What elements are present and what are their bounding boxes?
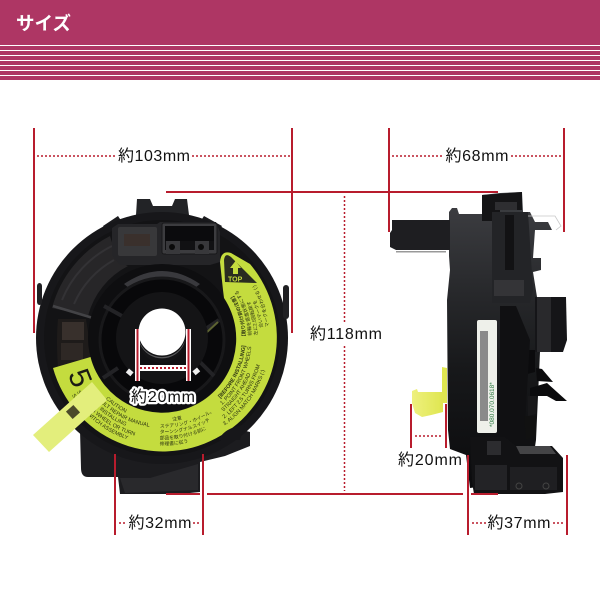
dimension lines: 32mm (114, 454, 204, 535)
dimension: 37mm: 約37mm (488, 514, 550, 532)
label text: japanese notes: 【取り付け前の注意】 (230, 296, 246, 336)
barcode label: *080.070.0618* (489, 382, 496, 427)
inner hub (88, 264, 236, 412)
label text: japanese notes: 合いマークを (253, 300, 264, 328)
label ring (53, 252, 277, 451)
label text: caution: STEERING WHEEL OR TURN (77, 390, 136, 436)
barcode label (477, 320, 497, 433)
label notch (219, 424, 245, 440)
number 5: 5 (61, 364, 98, 392)
side view of part (390, 192, 567, 494)
label text: caution japanese (160, 412, 212, 446)
side fins (524, 368, 567, 440)
side top clip (482, 192, 561, 303)
outer ring (36, 199, 289, 464)
label text: japanese notes (230, 285, 269, 336)
header banner (0, 0, 600, 80)
icon: top arrow: TOP (228, 276, 243, 284)
label text: japanese notes: マークを合わせる (:) (252, 285, 269, 327)
label text: caution japanese: ステアリング・ホイール、 (160, 412, 212, 428)
label text: caution japanese: 修理書に従う (160, 439, 188, 446)
label text: caution: CAUTION (106, 397, 127, 413)
dimension lines: hole 20mm (135, 329, 191, 381)
dimension lines: width 103mm (33, 128, 293, 333)
center hole (138, 308, 186, 356)
dimension: 32mm: 約32mm (128, 514, 192, 532)
yellow pull tab (33, 382, 107, 452)
label text: caution: CONSULT REPAIR MANUAL (102, 402, 150, 427)
title: サイズ (16, 13, 71, 34)
icon: top arrow (224, 255, 257, 284)
dimension: hole 20mm: 約20mm (131, 388, 195, 406)
yellow pin (412, 367, 447, 417)
label text: caution japanese: ターンシグナルスイッチ (160, 418, 209, 434)
dimension lines: depth 68mm (388, 128, 565, 232)
label text: installation notes (218, 346, 266, 426)
label text: installation notes: [BEFORE INSTALLING] (218, 346, 246, 399)
label text: installation notes: 2. LEFT 2.5 TURNS FROM (222, 364, 260, 418)
dimension: 68mm: 約68mm (446, 147, 508, 165)
dimension: pin 20mm: 約20mm (398, 451, 462, 469)
label text: caution: SIGNAL SWITCH ASSEMBLY (72, 394, 128, 439)
dimension: 103mm: 約103mm (118, 147, 190, 165)
horizontal and vertical extents of height (166, 191, 498, 495)
top connector block (112, 222, 220, 265)
dimension lines: 37mm (467, 455, 568, 535)
dimension lines: pin 20mm (410, 404, 447, 448)
side cylinder (512, 297, 567, 378)
label text: caution japanese: 注意 (172, 416, 182, 422)
front view of part (33, 199, 289, 494)
label text: installation notes: 3. ALIGN MATCH MARKS (:) (222, 370, 266, 426)
side connector left (390, 220, 450, 252)
side body (447, 192, 552, 488)
side bottom connector (470, 437, 563, 494)
lower connector housing (80, 425, 250, 494)
label text: installation notes: STRAIGHT AHEAD (221, 373, 250, 411)
label text: caution japanese: 部品を取り付ける前に (160, 426, 206, 440)
label text: installation notes: 1. POINT FRONT WHEELS (220, 346, 252, 405)
side body dark column (500, 306, 530, 440)
label text: caution: BEFORE INSTALLING (98, 406, 126, 426)
window (57, 319, 92, 368)
dimension: height 118mm: 約118mm (310, 325, 382, 343)
label text: japanese notes: 左に2.5回転戻す (246, 302, 258, 336)
label text: japanese notes: 前輪を直進状態にする (234, 291, 252, 336)
